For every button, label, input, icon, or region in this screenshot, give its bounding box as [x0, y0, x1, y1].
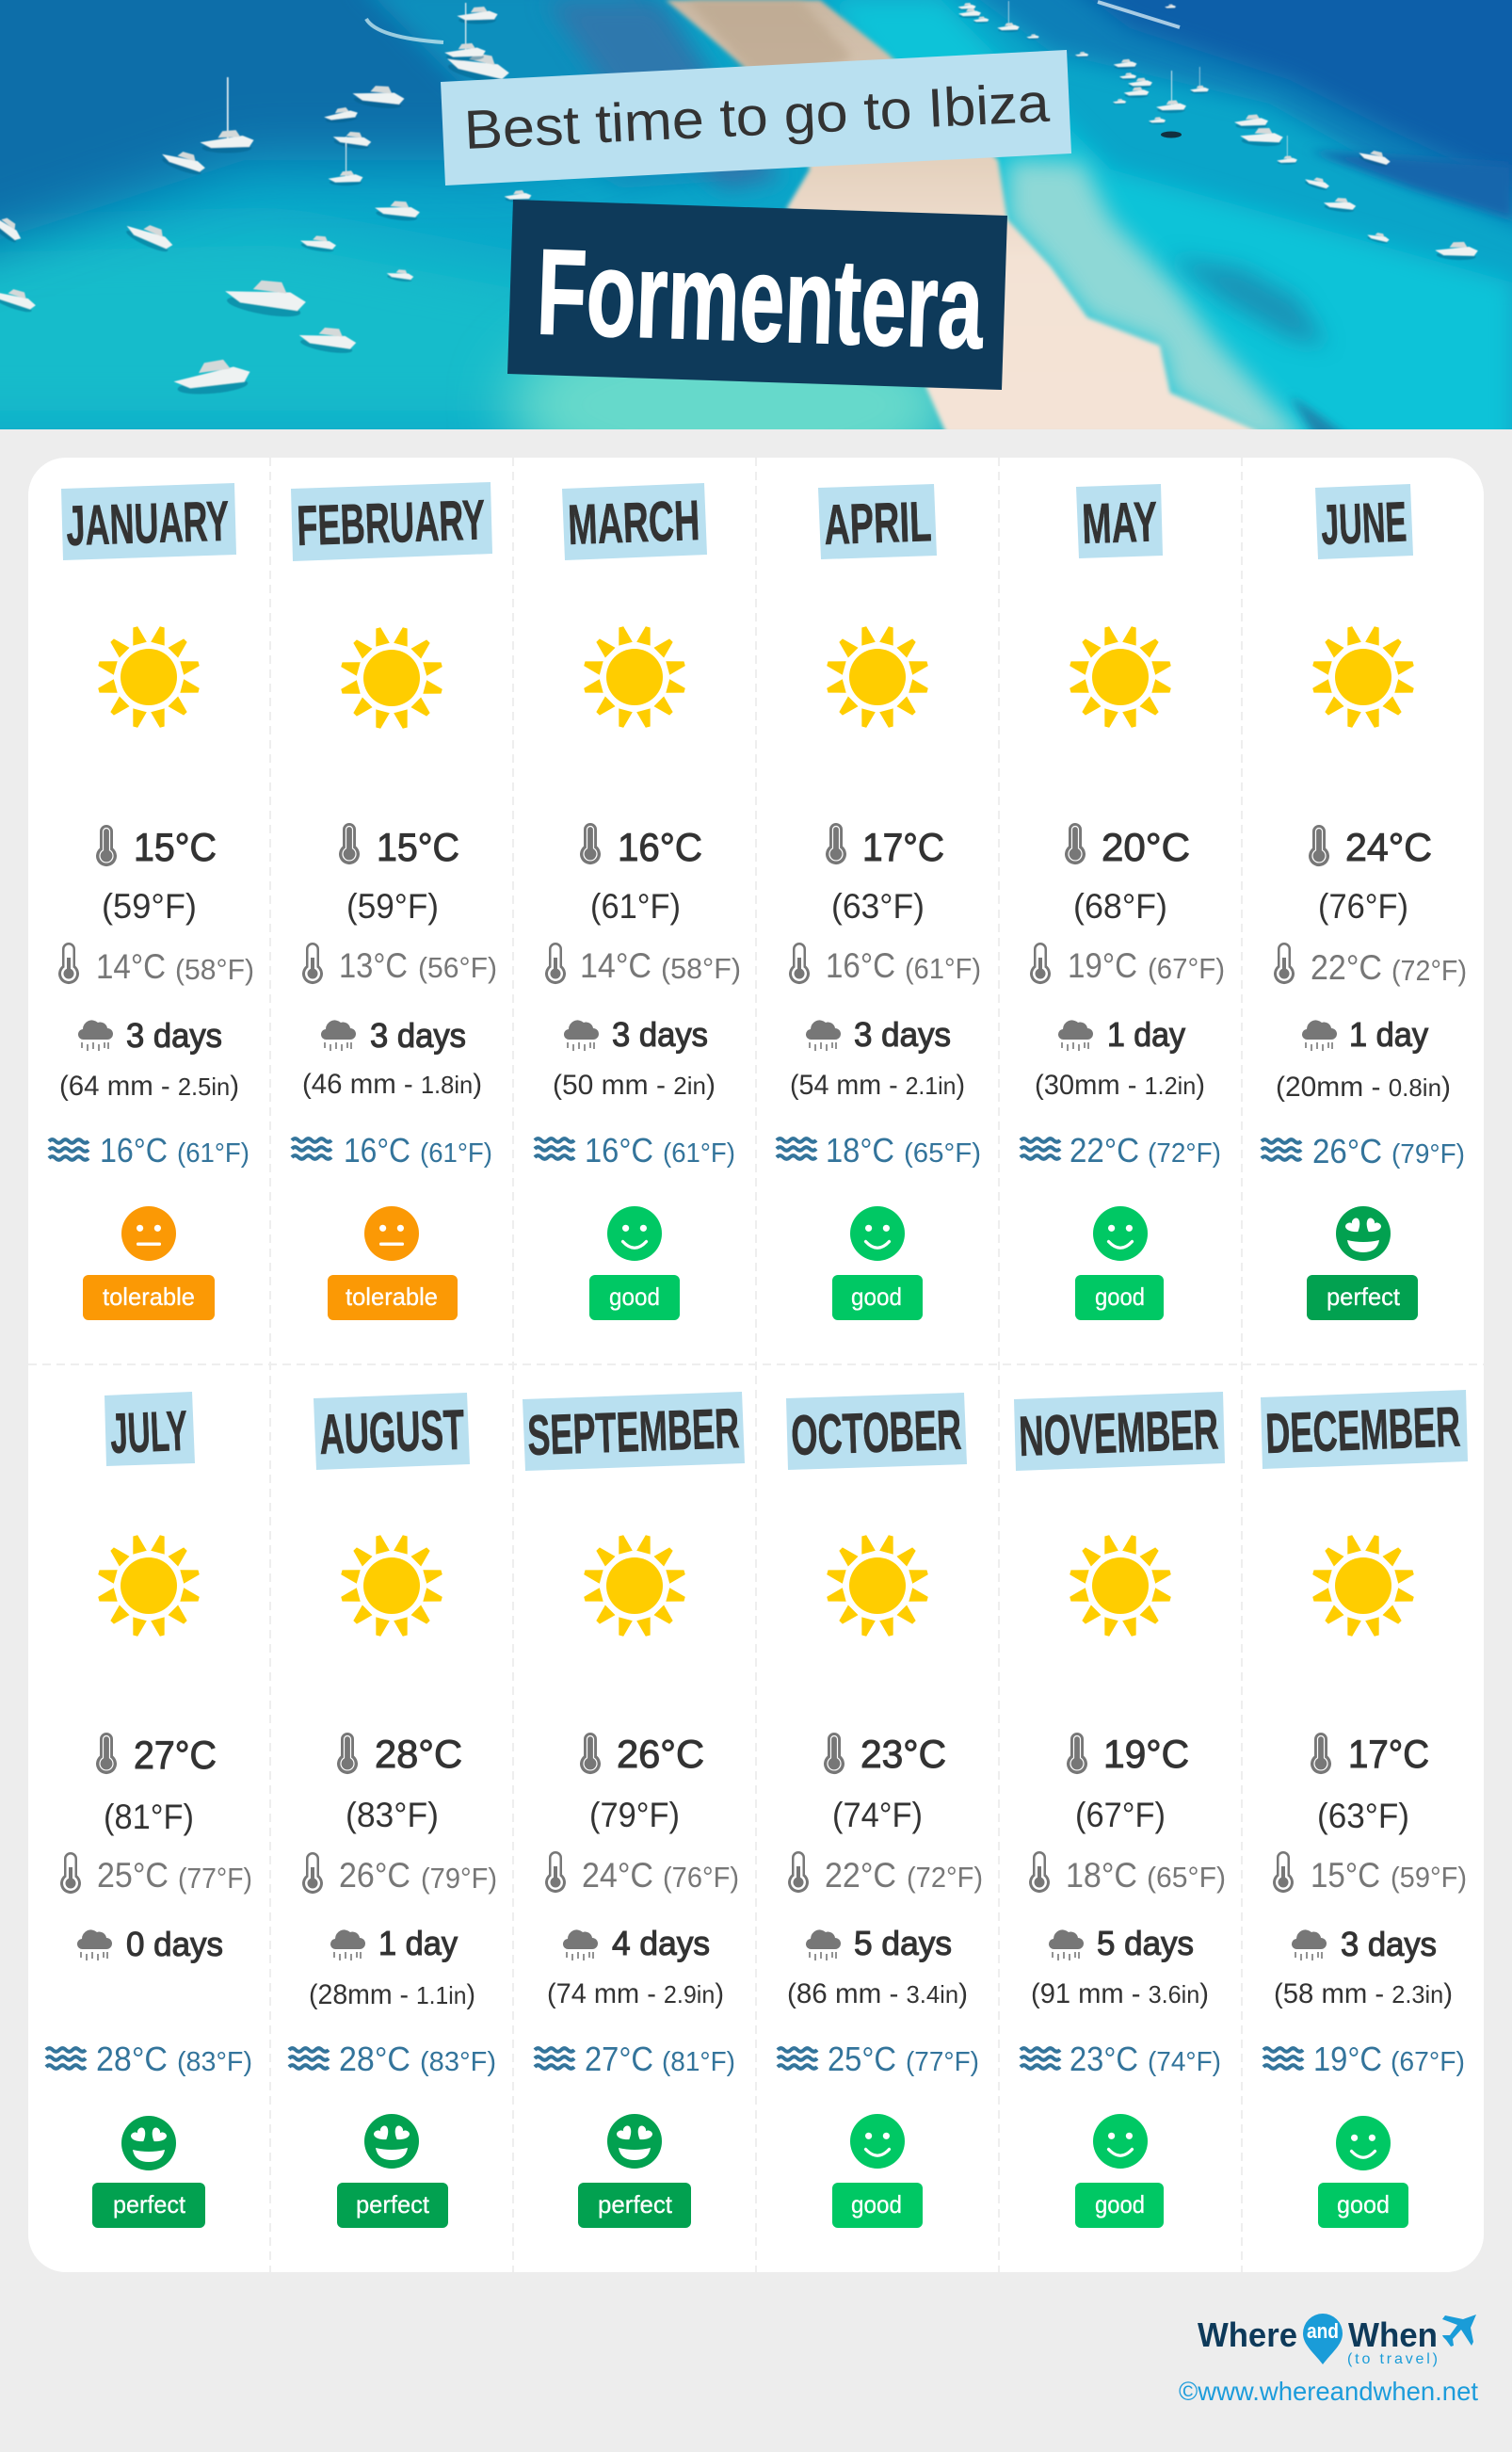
high temperature: 28°C — [375, 1732, 462, 1776]
low temperature — [789, 943, 981, 985]
hero photo: Formentera coastline — [0, 0, 1512, 429]
rating — [83, 1206, 215, 1320]
low temperature: 25°C — [97, 1856, 169, 1895]
rating: tolerable — [103, 1282, 195, 1311]
low temperature: (79°F) — [421, 1862, 497, 1895]
month label: SEPTEMBER — [526, 1396, 740, 1467]
sea temperature: (61°F) — [420, 1138, 492, 1169]
rainfall — [790, 1015, 965, 1101]
low temperature: 14°C — [580, 946, 651, 985]
logo: Where and When to travel — [1198, 2314, 1476, 2367]
sea temperature: 19°C — [1313, 2040, 1382, 2078]
rainfall — [1035, 1015, 1205, 1101]
sea temperature — [535, 2040, 735, 2078]
logo: Where and When to travel: Where — [1198, 2315, 1297, 2354]
low temperature: (58°F) — [661, 952, 741, 985]
rating: good — [851, 1282, 902, 1311]
rainfall — [309, 1924, 475, 2010]
sea temperature: (65°F) — [904, 1138, 981, 1169]
icon: sun — [1311, 625, 1415, 729]
month label: MAY — [1081, 490, 1158, 556]
icon: sun — [97, 1534, 201, 1637]
low temperature — [58, 943, 254, 986]
sea temperature: 28°C — [96, 2040, 168, 2078]
high temperature: 19°C — [1103, 1732, 1189, 1776]
month: December — [1261, 1390, 1468, 2228]
month: May — [1021, 484, 1225, 1320]
low temperature: (58°F) — [175, 953, 254, 986]
sea temperature — [292, 1131, 492, 1170]
rating: good — [851, 2190, 902, 2218]
high temperature: 17°C — [1348, 1732, 1429, 1776]
rainfall: (54 mm - 2.1in) — [790, 1070, 965, 1101]
low temperature: (61°F) — [905, 952, 981, 985]
rainfall: (20mm - 0.8in) — [1276, 1072, 1451, 1103]
sea temperature: (83°F) — [420, 2047, 496, 2077]
rating — [1307, 1206, 1418, 1320]
icon: sun — [1069, 1534, 1172, 1637]
sea temperature: (83°F) — [177, 2047, 252, 2077]
sea temperature — [777, 1131, 981, 1170]
high temperature — [1067, 1732, 1189, 1834]
sea temperature: 27°C — [585, 2040, 653, 2078]
low temperature: (72°F) — [1391, 954, 1467, 987]
month label — [105, 1392, 195, 1466]
rating: good — [1095, 2190, 1145, 2218]
rainfall: (91 mm - 3.6in) — [1031, 1978, 1209, 2009]
rainfall: (28mm - 1.1in) — [309, 1979, 475, 2010]
rainfall: 3 days — [612, 1015, 708, 1054]
high temperature: (61°F) — [590, 887, 681, 926]
high temperature: (59°F) — [346, 887, 439, 926]
month label — [1014, 1392, 1225, 1471]
rating — [832, 1206, 923, 1320]
rainfall: 1 day — [1349, 1015, 1428, 1054]
icon: sun — [583, 625, 686, 729]
icon: sun — [826, 1534, 929, 1637]
high temperature — [96, 825, 217, 926]
high temperature — [580, 823, 702, 926]
month label: JUNE — [1320, 490, 1407, 557]
high temperature: 26°C — [617, 1732, 704, 1776]
month: April — [777, 484, 981, 1320]
high temperature — [96, 1733, 217, 1836]
month: February — [291, 482, 497, 1320]
rainfall: 5 days — [1097, 1924, 1194, 1962]
high temperature: (81°F) — [104, 1798, 194, 1836]
rainfall — [1031, 1924, 1209, 2009]
high temperature: 27°C — [134, 1733, 217, 1777]
rainfall — [547, 1924, 724, 2009]
low temperature — [545, 1851, 739, 1895]
low temperature — [788, 1851, 983, 1895]
high temperature: (67°F) — [1075, 1796, 1166, 1834]
sea temperature: 25°C — [828, 2040, 896, 2078]
low temperature — [1273, 1851, 1467, 1895]
low temperature: 18°C — [1066, 1856, 1137, 1895]
icon: sun — [583, 1534, 686, 1637]
rating: good — [609, 1282, 660, 1311]
sea temperature — [1263, 2040, 1465, 2078]
rainfall — [77, 1925, 223, 1963]
month label — [314, 1393, 470, 1470]
month label: MARCH — [567, 489, 700, 557]
high temperature: (79°F) — [589, 1796, 680, 1834]
title banner — [507, 200, 1007, 390]
low temperature: 22°C — [1311, 948, 1382, 987]
sea temperature: 16°C — [585, 1131, 653, 1170]
sea temperature: (61°F) — [177, 1138, 249, 1169]
low temperature: 22°C — [825, 1856, 896, 1895]
rating: tolerable — [346, 1282, 438, 1311]
month label: JULY — [109, 1399, 188, 1465]
low temperature: (76°F) — [663, 1861, 739, 1894]
rating — [832, 2114, 923, 2228]
logo: Where and When to travel: When — [1348, 2315, 1438, 2354]
month: January — [49, 483, 254, 1320]
rating — [337, 2114, 448, 2228]
low temperature: (59°F) — [1391, 1861, 1467, 1894]
month label — [1076, 484, 1163, 558]
rainfall: (30mm - 1.2in) — [1035, 1070, 1205, 1101]
high temperature — [1309, 825, 1432, 926]
low temperature: 24°C — [582, 1856, 653, 1895]
high temperature: 24°C — [1345, 825, 1432, 869]
month label — [1315, 484, 1413, 559]
rating: good — [1337, 2190, 1390, 2218]
rainfall — [302, 1016, 482, 1100]
icon: sun — [97, 625, 201, 729]
rating: perfect — [113, 2190, 186, 2218]
sea temperature — [49, 1131, 249, 1170]
rainfall: 4 days — [612, 1924, 710, 1962]
month: September — [523, 1392, 745, 2228]
icon: sun — [340, 626, 443, 730]
rainfall: 0 days — [126, 1925, 223, 1963]
rainfall: (50 mm - 2in) — [553, 1070, 716, 1101]
month label: OCTOBER — [790, 1398, 962, 1467]
logo: Where and When to travel: (to travel) — [1347, 2351, 1438, 2367]
title banner: Formentera — [535, 224, 986, 375]
sea temperature: 22°C — [1070, 1131, 1139, 1170]
rating — [1075, 1206, 1164, 1320]
high temperature: 15°C — [134, 825, 217, 869]
rating — [1318, 2116, 1408, 2228]
month: July — [46, 1392, 252, 2228]
rainfall: (58 mm - 2.3in) — [1274, 1978, 1453, 2009]
month label — [523, 1392, 745, 1471]
rainfall: 5 days — [854, 1924, 952, 1962]
rainfall: 3 days — [854, 1015, 951, 1054]
website credit: ©www.whereandwhen.net — [1179, 2377, 1478, 2406]
sea temperature — [289, 2040, 496, 2078]
sea temperature: (79°F) — [1391, 1139, 1465, 1170]
low temperature — [60, 1852, 252, 1895]
month: March — [535, 483, 741, 1320]
low temperature — [1029, 1851, 1226, 1895]
rainfall — [787, 1924, 968, 2009]
high temperature: (74°F) — [832, 1796, 923, 1834]
sea temperature: (74°F) — [1148, 2047, 1221, 2077]
high temperature: (76°F) — [1318, 887, 1408, 926]
month: October — [778, 1393, 983, 2228]
subtitle banner: Best time to go to Ibiza — [463, 73, 1052, 161]
high temperature — [339, 823, 459, 926]
icon: airplane — [1442, 2315, 1476, 2347]
rainfall — [553, 1015, 716, 1101]
icon: sun — [1311, 1534, 1415, 1637]
icon: sun — [340, 1534, 443, 1637]
icon: sun — [826, 625, 929, 729]
rating — [1075, 2114, 1164, 2228]
sea temperature: 16°C — [100, 1131, 168, 1170]
sea temperature: 28°C — [339, 2040, 410, 2078]
panel: monthly weather card — [28, 458, 1484, 2272]
high temperature: 15°C — [377, 825, 459, 869]
rating: good — [1095, 1282, 1145, 1311]
low temperature: (72°F) — [907, 1861, 983, 1894]
sea temperature: (67°F) — [1391, 2047, 1465, 2077]
rainfall: (64 mm - 2.5in) — [59, 1071, 239, 1102]
high temperature: 16°C — [618, 825, 702, 869]
high temperature: (63°F) — [1317, 1797, 1409, 1835]
sea temperature: 23°C — [1070, 2040, 1138, 2078]
rating — [578, 2114, 691, 2228]
low temperature: 14°C — [96, 947, 166, 986]
high temperature — [1065, 823, 1190, 926]
sea temperature: (72°F) — [1148, 1138, 1221, 1169]
logo: Where and When to travel: and — [1307, 2319, 1339, 2343]
high temperature: (68°F) — [1073, 887, 1167, 926]
icon: sun — [1069, 625, 1172, 729]
sea temperature: (81°F) — [662, 2047, 735, 2077]
low temperature: (77°F) — [178, 1862, 252, 1895]
rainfall: 1 day — [378, 1924, 458, 1962]
sea temperature: (61°F) — [663, 1138, 735, 1169]
high temperature — [580, 1732, 704, 1834]
rainfall: 3 days — [126, 1016, 222, 1055]
low temperature: 26°C — [339, 1856, 410, 1895]
rainfall: (74 mm - 2.9in) — [547, 1978, 724, 2009]
sea temperature — [1021, 1131, 1221, 1170]
rainfall — [1276, 1015, 1451, 1103]
month: June — [1262, 484, 1467, 1320]
month label — [562, 483, 707, 560]
high temperature: 17°C — [862, 825, 944, 869]
sea temperature: (77°F) — [906, 2047, 979, 2077]
month label: NOVEMBER — [1018, 1397, 1219, 1468]
rainfall: 3 days — [370, 1016, 466, 1055]
month label: APRIL — [823, 490, 932, 557]
rainfall: (46 mm - 1.8in) — [302, 1069, 482, 1100]
rating — [328, 1206, 458, 1320]
low temperature: 13°C — [339, 946, 408, 985]
sea temperature: 26°C — [1312, 1132, 1382, 1170]
high temperature — [826, 823, 944, 926]
sea temperature — [535, 1131, 735, 1170]
low temperature: (65°F) — [1147, 1861, 1226, 1894]
low temperature: 15°C — [1311, 1856, 1380, 1895]
low temperature — [1274, 943, 1467, 987]
month label: AUGUST — [318, 1398, 465, 1466]
low temperature: 16°C — [826, 946, 895, 985]
month label — [818, 484, 937, 559]
high temperature — [824, 1732, 946, 1834]
month: November — [1014, 1392, 1226, 2228]
rating: perfect — [598, 2190, 673, 2218]
high temperature — [1311, 1732, 1429, 1835]
rainfall: 3 days — [1341, 1925, 1437, 1963]
month label — [61, 483, 236, 560]
sea temperature — [778, 2040, 979, 2078]
month label — [291, 482, 492, 561]
rainfall: (86 mm - 3.4in) — [787, 1978, 968, 2009]
icon: map pin — [1303, 2314, 1343, 2364]
month label: FEBRUARY — [296, 488, 486, 557]
sea temperature — [46, 2040, 252, 2078]
high temperature: (83°F) — [346, 1796, 439, 1834]
sea temperature — [1021, 2040, 1221, 2078]
high temperature: 20°C — [1102, 825, 1190, 869]
subtitle banner — [441, 50, 1071, 186]
rating: perfect — [356, 2190, 430, 2218]
low temperature — [1030, 943, 1225, 985]
low temperature — [545, 943, 741, 985]
month label — [786, 1393, 967, 1470]
low temperature: (56°F) — [418, 951, 497, 984]
rainfall — [59, 1016, 239, 1102]
low temperature — [302, 943, 497, 985]
high temperature: 23°C — [861, 1732, 946, 1776]
sea temperature: 16°C — [344, 1131, 410, 1170]
high temperature — [337, 1732, 462, 1834]
month label: JANUARY — [65, 490, 230, 557]
high temperature: (59°F) — [102, 887, 197, 926]
low temperature: 19°C — [1068, 946, 1137, 985]
high temperature: (63°F) — [831, 887, 925, 926]
rainfall — [1274, 1925, 1453, 2009]
rating — [92, 2116, 205, 2228]
rainfall: 1 day — [1107, 1015, 1185, 1054]
sea temperature: 18°C — [826, 1131, 894, 1170]
rating — [589, 1206, 680, 1320]
sea temperature — [1262, 1132, 1465, 1170]
rating: perfect — [1327, 1282, 1401, 1311]
month: August — [289, 1393, 497, 2228]
low temperature: (67°F) — [1148, 952, 1225, 985]
low temperature — [302, 1852, 497, 1895]
